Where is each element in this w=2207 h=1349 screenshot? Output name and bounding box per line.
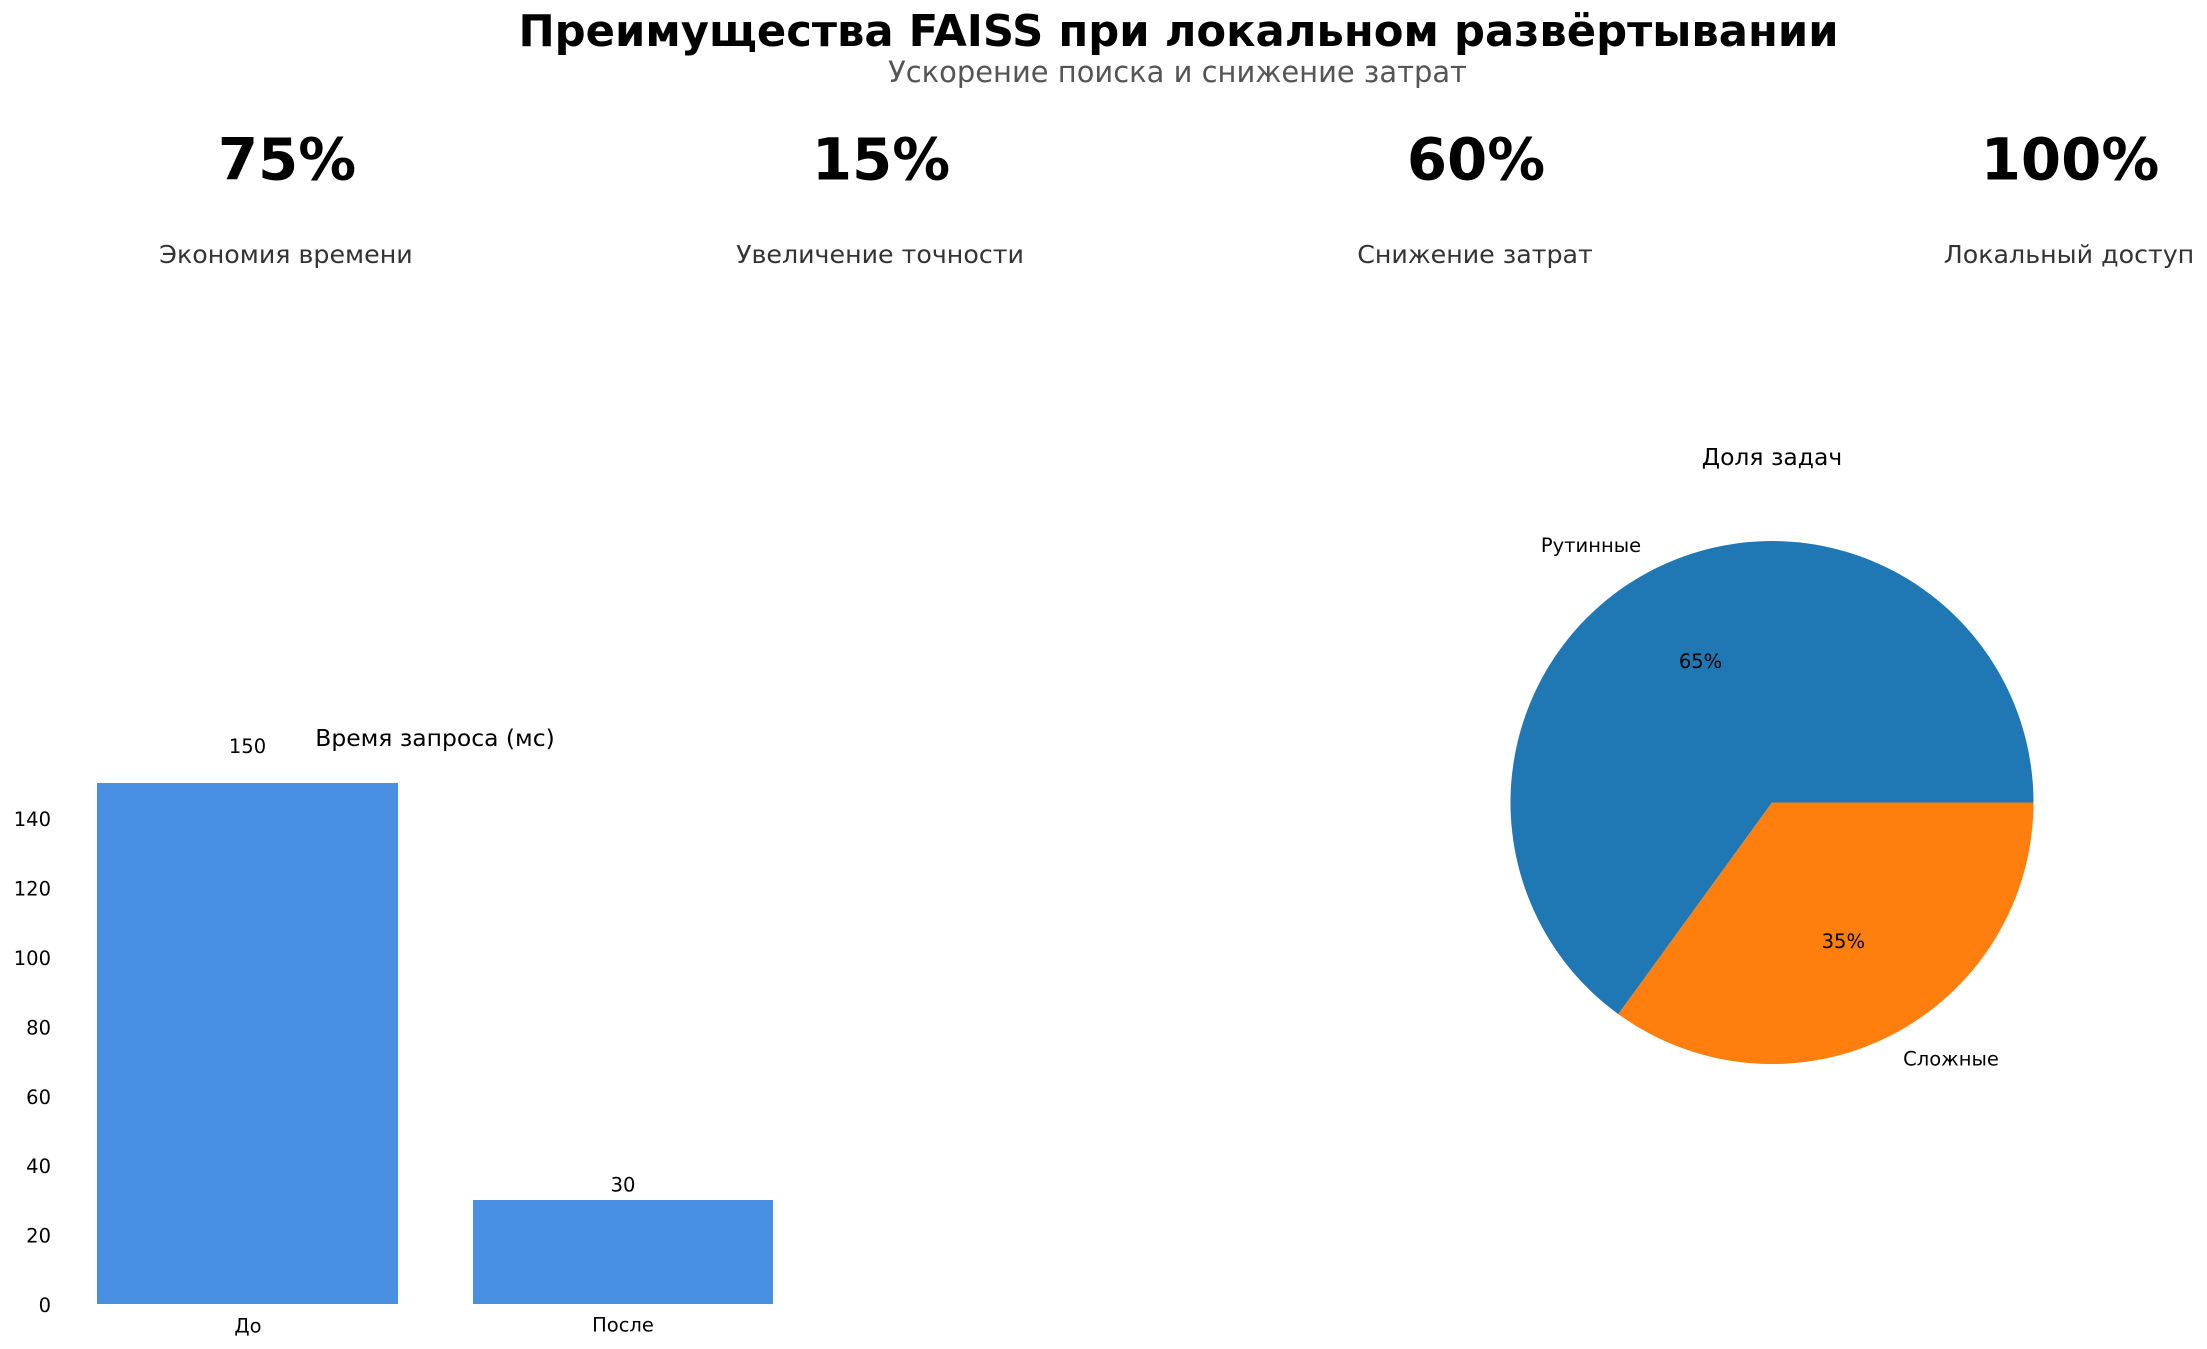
y axis labels: 140: [14, 808, 51, 831]
y axis labels: 0: [39, 1294, 51, 1317]
KPI: cost reduction: Снижение затрат: [1357, 240, 1593, 269]
bar chart: query time: [14, 724, 773, 1338]
KPI: cost reduction: [1357, 126, 1593, 269]
pie chart: task share: [1510, 443, 2034, 1070]
KPI: accuracy increase: Увеличение точности: [736, 240, 1024, 269]
subtitle: Ускорение поиска и снижение затрат: [888, 55, 1467, 89]
KPI: time savings: [159, 126, 413, 269]
pie percent: 35%: 35%: [1822, 930, 1865, 953]
pie slice: complex 35%: [1618, 802, 2034, 1064]
value label: before: 150: [229, 735, 266, 758]
x axis label: after: После: [592, 1314, 654, 1337]
y axis labels: 40: [26, 1155, 51, 1178]
KPI: cost reduction: 60%: [1407, 126, 1545, 194]
pie label: complex: Сложные: [1903, 1048, 1999, 1070]
pie slice: routine 65%: [1510, 541, 2034, 1014]
y axis labels: 60: [26, 1086, 51, 1109]
pie label: routine: Рутинные: [1541, 534, 1641, 557]
value label: after: 30: [611, 1174, 635, 1196]
KPI: local access: Локальный доступ: [1944, 240, 2194, 269]
pie chart title: Доля задач: [1702, 443, 1842, 471]
bar: before: [97, 783, 398, 1304]
pie percent: 65%: 65%: [1679, 650, 1722, 673]
x axis label: before: До: [234, 1315, 262, 1338]
y axis labels: 20: [26, 1225, 51, 1248]
KPI: time savings: 75%: [218, 126, 356, 194]
title: Преимущества FAISS при локальном развёртывании: [518, 7, 1839, 57]
KPI row: [159, 126, 2194, 269]
y axis labels: 80: [26, 1016, 51, 1039]
KPI: local access: [1944, 126, 2194, 269]
KPI: accuracy increase: 15%: [812, 126, 950, 194]
bar: after: [473, 1200, 773, 1304]
bar chart title: Время запроса (мс): [315, 724, 555, 752]
KPI: accuracy increase: [736, 126, 1024, 269]
y axis labels: 120: [14, 877, 51, 900]
y axis labels: 100: [14, 947, 51, 970]
y axis labels: [14, 808, 51, 1317]
KPI: time savings: Экономия времени: [159, 240, 413, 269]
KPI: local access: 100%: [1981, 126, 2159, 194]
